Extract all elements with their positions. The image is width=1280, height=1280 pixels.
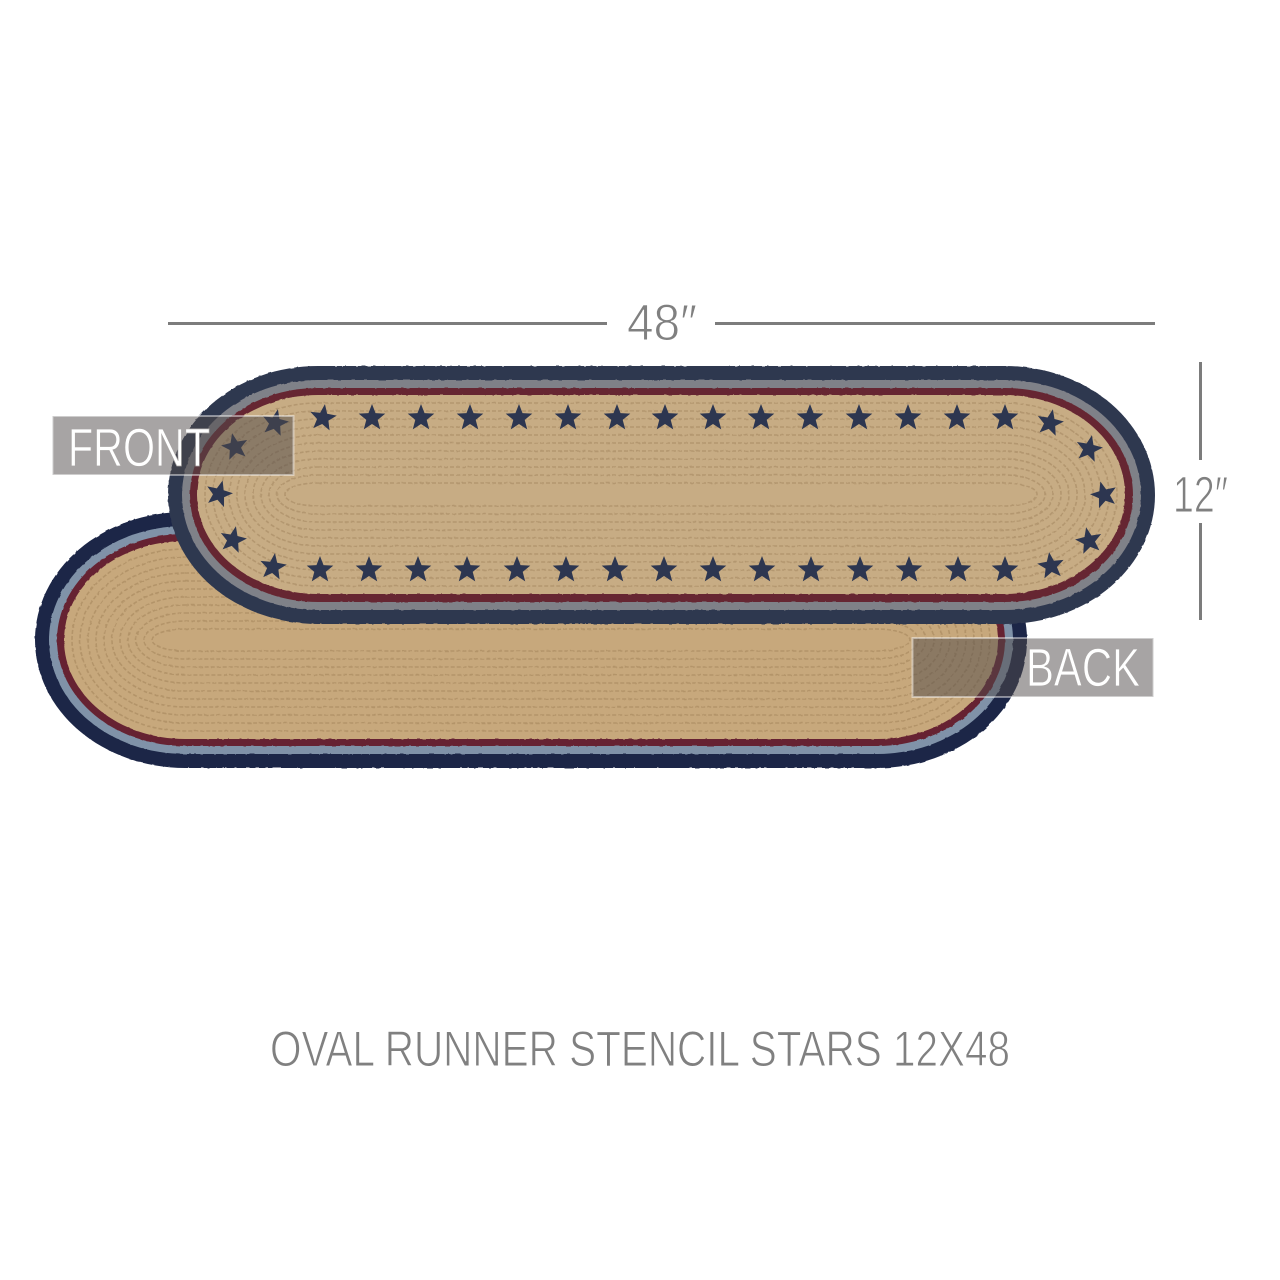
- front rug: [168, 366, 1155, 624]
- width dimension: 48 inches: [168, 294, 1155, 351]
- stenciled stars: [203, 402, 1120, 581]
- BACK label: BACK: [1026, 638, 1140, 698]
- front rug braided bands: [168, 366, 1155, 624]
- title caption: OVAL RUNNER STENCIL STARS 12X48: [270, 1021, 1010, 1077]
- back rug: [35, 512, 1027, 768]
- height dimension: 12 inches: [1173, 362, 1228, 620]
- width dimension: 48 inches: 48″: [627, 294, 697, 351]
- BACK label: [912, 638, 1154, 698]
- height dimension: 12 inches: 12″: [1173, 466, 1228, 523]
- FRONT label: FRONT: [68, 418, 210, 478]
